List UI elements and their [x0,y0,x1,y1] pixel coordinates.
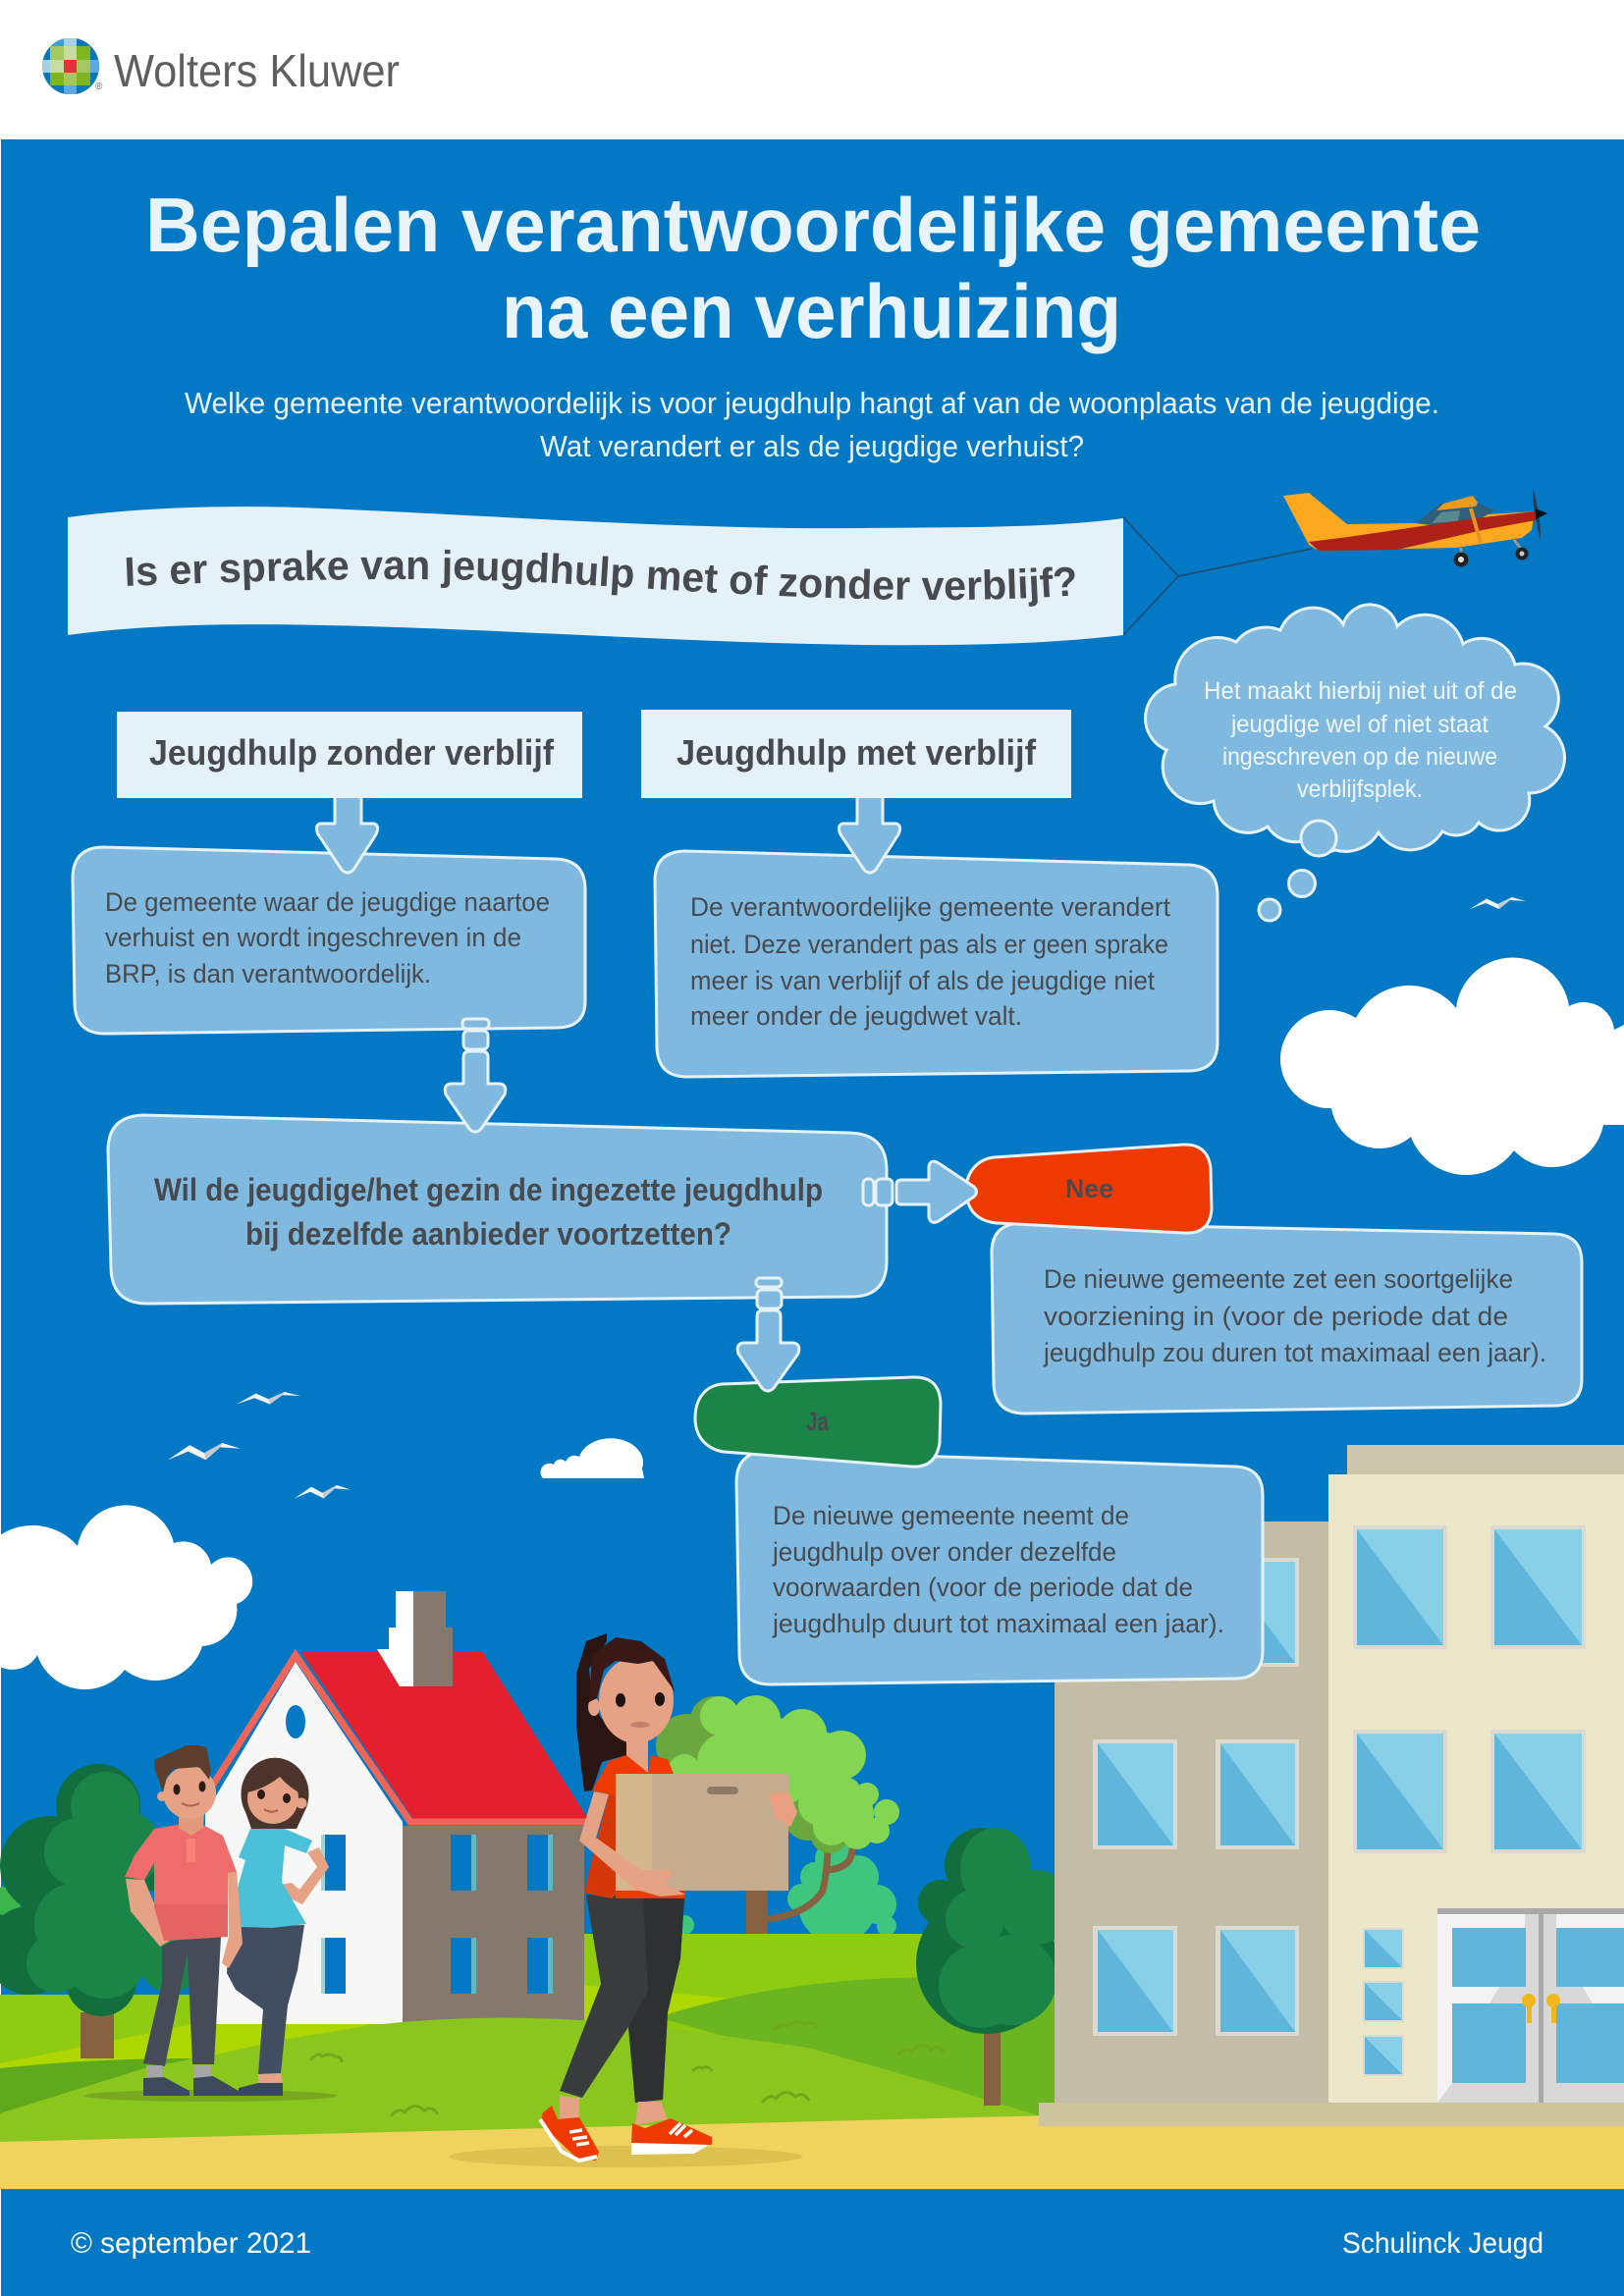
answer text: nee: voorziening in (voor de periode dat de [1044,1302,1508,1331]
thought cloud: verblijfsplek. [1297,775,1423,803]
box: zonder verblijf text: BRP, is dan verantwoordelijk. [105,959,431,988]
white cloud right [1280,958,1624,1175]
door [1437,1908,1624,2103]
answer text: ja: De nieuwe gemeente neemt de [773,1501,1129,1530]
grass front [0,2018,1041,2155]
road [0,2115,1624,2189]
box: zonder verblijf text [73,847,585,1034]
rope: banner to plane [1123,517,1312,635]
heading: met verblijf: Jeugdhulp met verblijf [677,732,1037,773]
box: zonder verblijf text: verhuist en wordt ingeschreven in de [105,923,521,952]
title: na een verhuizing [502,268,1121,354]
banner: Is er sprake van jeugdhulp met of zonder verblijf? [126,550,1074,607]
woman with cyan shirt [227,1758,329,2096]
box: met verblijf text: De verantwoordelijke gemeente verandert [690,892,1170,922]
white cloud small [541,1438,644,1478]
question box: Wil de jeugdige/het gezin de ingezette jeugdhulp [154,1172,823,1207]
thought cloud: jeugdige wel of niet staat [1230,711,1489,738]
tree behind woman [656,1695,899,1995]
heading: zonder verblijf [117,712,582,798]
box: met verblijf text: meer is van verblijf of als de jeugdige niet [690,966,1155,995]
thought cloud: Het maakt hierbij niet uit of de [1204,677,1517,705]
arrow: zonder verblijf down [316,798,378,873]
answer text: ja [736,1451,1263,1684]
grass lime band left [0,2022,373,2073]
answer text: nee [992,1223,1582,1414]
bird [237,1392,300,1404]
face [599,1657,674,1743]
windows [1353,1525,1586,2076]
footer: Schulinck Jeugd [1342,2227,1543,2260]
heading: zonder verblijf: Jeugdhulp zonder verblijf [149,732,555,773]
shoes [540,2106,599,2161]
thought cloud: ingeschreven op de nieuwe [1222,743,1497,771]
hand [769,1791,797,1827]
pants [560,1895,684,2103]
grass tufts [310,2021,945,2116]
building left [1055,1522,1328,2103]
arrow: box to question [445,1019,506,1132]
couple [83,1745,337,2102]
subtitle: Welke gemeente verantwoordelijk is voor jeugdhulp hangt af van de woonplaats van de jeugdige. [185,386,1439,420]
box [616,1774,652,1891]
box: met verblijf text [655,851,1218,1077]
footer [1,2189,1624,2296]
tree right [916,1828,1073,2106]
man with pink shirt [125,1745,243,2096]
answer pill: ja: Ja [806,1407,830,1436]
bird [1470,897,1526,909]
building base [1039,2103,1624,2126]
grass lime band right [579,1985,731,2022]
windows [1093,1558,1299,2036]
logo: Wolters Kluwer: ® [95,81,103,92]
answer pill: ja [695,1377,941,1467]
ankles [560,2096,579,2125]
top hair [589,1637,675,1702]
box: zonder verblijf text: De gemeente waar de jeugdige naartoe [105,887,550,917]
grass dark hill left [0,2058,191,2115]
plane [1283,488,1547,567]
question box [108,1115,887,1304]
ponytail [576,1633,626,1791]
white cloud left [0,1505,252,1689]
bird [295,1485,351,1498]
woman with box [449,1633,802,2167]
title [145,182,1481,354]
subtitle [185,386,1439,463]
neck [626,1739,648,1775]
answer text: ja: jeugdhulp over onder dezelfde [772,1537,1116,1567]
box: met verblijf text: meer onder de jeugdwet valt. [690,1001,1022,1031]
title: Bepalen verantwoordelijke gemeente [145,182,1481,268]
answer text: nee: De nieuwe gemeente zet een soortgelijke [1044,1264,1513,1294]
banner [68,507,1123,646]
bird [168,1443,241,1460]
grass back [0,1934,1055,2150]
answer text: nee: jeugdhulp zou duren tot maximaal een jaar). [1043,1338,1546,1367]
answer text: ja: voorwaarden (voor de periode dat de [773,1573,1193,1602]
shirt [592,1755,685,1898]
heading: met verblijf [641,710,1071,798]
subtitle: Wat verandert er als de jeugdige verhuist? [540,429,1084,463]
arm [579,1791,685,1896]
answer text: ja: jeugdhulp duurt tot maximaal een jaar). [772,1609,1224,1638]
answer pill: nee [966,1145,1212,1233]
logo: Wolters Kluwer [42,38,400,96]
thought cloud [1146,605,1565,921]
arrow: question to nee [863,1161,976,1222]
footer: © september 2021 [71,2227,311,2260]
grass dark hill right [658,1977,1055,2120]
question box: bij dezelfde aanbieder voortzetten? [245,1216,731,1252]
answer pill: nee: Nee [1065,1174,1113,1203]
arrow: question to ja [737,1278,799,1391]
box: met verblijf text: niet. Deze verandert pas als er geen sprake [690,930,1168,959]
house [205,1591,588,2024]
tree left [0,1764,199,2058]
building right [1328,1445,1624,2103]
logo: Wolters Kluwer: Wolters Kluwer [114,45,400,96]
arrow: met verblijf down [839,798,900,873]
